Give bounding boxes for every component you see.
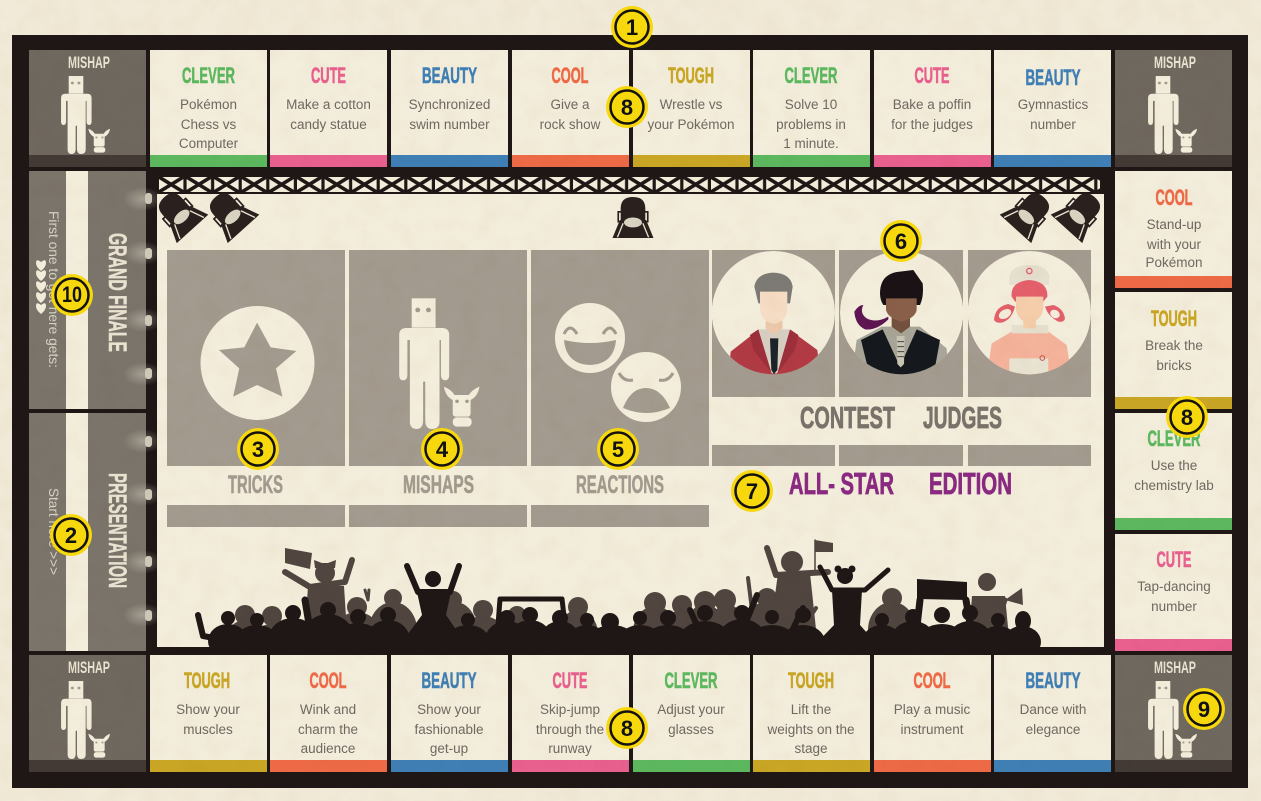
card: cute skip-jump [512, 655, 629, 772]
card: cool music [874, 655, 991, 772]
top row of cards [150, 50, 1111, 167]
badge 8 top [606, 86, 648, 128]
corner: mishap bottom right [1115, 655, 1232, 772]
card: cute skip-jump: runway [548, 741, 592, 756]
presentation lights [123, 429, 163, 627]
icon: happy face [555, 303, 625, 373]
card: clever chess: Pokémon [180, 97, 237, 112]
badge 1: 1 [626, 15, 638, 40]
card: tough wrestle: Wrestle vs [660, 97, 723, 112]
badge 8 top: 8 [621, 95, 633, 120]
grand finale title: GRAND FINALE [103, 233, 131, 352]
badge 4: 4 [436, 437, 449, 462]
card: clever problems: 1 minute. [783, 136, 839, 151]
card: beauty swim: swim number [409, 117, 490, 132]
contest judges label: JUDGES [923, 400, 1002, 435]
card: beauty dance: Dance with [1020, 702, 1086, 717]
card: clever problems: CLEVER [784, 63, 838, 88]
card: tough muscles: Show your [176, 702, 240, 717]
card: beauty swim: Synchronized [409, 97, 490, 112]
card: tough bricks: Break the [1145, 338, 1203, 353]
card: tough muscles: TOUGH [184, 668, 230, 693]
panel: mishaps [349, 250, 527, 527]
badge 10 [51, 274, 93, 316]
panel: reactions [531, 250, 709, 527]
start here text: Start here >>> [46, 488, 62, 575]
badge 9 [1183, 688, 1225, 730]
card: clever chemistry: chemistry lab [1134, 478, 1214, 493]
card: cute tap-dancing [1115, 534, 1232, 651]
card: cute tap-dancing: CUTE [1156, 547, 1192, 572]
card: clever problems: problems in [776, 117, 846, 132]
judge: man in black vest [840, 251, 963, 377]
presentation title: PRESENTATION [103, 473, 131, 588]
stage area [148, 172, 1111, 648]
card: tough weights: Lift the [791, 702, 831, 717]
card: cute tap-dancing: number [1151, 599, 1197, 614]
reactions label: REACTIONS [576, 471, 664, 499]
judge portraits [712, 251, 1091, 377]
contest judges label: CONTEST [800, 400, 895, 435]
card: cool music: Play a music [894, 702, 971, 717]
card: cute skip-jump: through the [536, 722, 604, 737]
badge 1 [611, 6, 653, 48]
lighting truss [157, 172, 1104, 194]
card: clever glasses: Adjust your [657, 702, 725, 717]
card: cool music: COOL [914, 668, 950, 693]
card: cute statue [270, 50, 387, 167]
card: cool music: instrument [900, 722, 964, 737]
card: clever glasses [633, 655, 750, 772]
badge 5: 5 [612, 437, 624, 462]
corner: mishap bottom left: MISHAP [68, 658, 110, 677]
badge 8 right: 8 [1181, 405, 1193, 430]
panel: contest judges [712, 250, 1091, 466]
card: clever chess: Chess vs [181, 117, 237, 132]
card: cute statue: candy statue [290, 117, 367, 132]
card: cool stand-up: COOL [1156, 185, 1192, 210]
crowd silhouette [157, 540, 1104, 662]
badge 5 [597, 428, 639, 470]
corner: mishap top right [1115, 50, 1232, 167]
panel: grand finale [29, 171, 163, 409]
all-star edition heading: EDITION [929, 466, 1012, 501]
card: clever glasses: glasses [668, 722, 714, 737]
bottom row of cards [150, 655, 1111, 772]
card: beauty dance [994, 655, 1111, 772]
card: cute poffin [874, 50, 991, 167]
card: tough bricks: TOUGH [1151, 306, 1197, 331]
card: tough bricks: bricks [1156, 358, 1192, 373]
panel: tricks [167, 250, 345, 527]
card: cool wink: COOL [310, 668, 346, 693]
card: beauty dance: BEAUTY [1026, 668, 1081, 693]
corner: mishap bottom right: MISHAP [1154, 658, 1196, 677]
right column of cards [1115, 171, 1232, 651]
badge 6 [880, 220, 922, 262]
card: cool rock show: rock show [540, 117, 601, 132]
corner: mishap top right: MISHAP [1154, 53, 1196, 72]
card: tough weights: stage [794, 741, 828, 756]
card: cute statue: CUTE [311, 63, 346, 88]
card: tough weights [753, 655, 870, 772]
icon: masked man and pokémon [399, 298, 480, 429]
card: clever chemistry: CLEVER [1148, 426, 1201, 451]
badge 6: 6 [895, 229, 907, 254]
card: clever chess: Computer [179, 136, 239, 151]
grand finale rule: First one to get here gets: [46, 211, 62, 368]
corner: mishap top left [29, 50, 146, 167]
card: cool stand-up [1115, 171, 1232, 288]
card: beauty fashion [391, 655, 508, 772]
card: tough wrestle: TOUGH [668, 63, 714, 88]
card: tough wrestle: your Pokémon [647, 117, 735, 132]
stage spotlights [148, 183, 1111, 243]
card: beauty fashion: fashionable [414, 722, 484, 737]
panel: presentation [29, 413, 163, 651]
card: clever chemistry: Use the [1151, 458, 1197, 473]
card: cool rock show: COOL [552, 63, 588, 88]
badge 7 [731, 470, 773, 512]
corner: mishap bottom left [29, 655, 146, 772]
mishaps label: MISHAPS [403, 471, 474, 499]
badge 2: 2 [65, 523, 77, 548]
tricks label: TRICKS [228, 471, 283, 499]
card: clever glasses: CLEVER [664, 668, 718, 693]
judge: nurse [968, 251, 1091, 377]
card: cute poffin: CUTE [914, 63, 950, 88]
card: cool wink: Wink and [300, 702, 356, 717]
card: cool wink: charm the [298, 722, 358, 737]
badge 3 [237, 428, 279, 470]
card: cool wink [270, 655, 387, 772]
card: beauty fashion: BEAUTY [422, 668, 477, 693]
badge 9: 9 [1198, 697, 1210, 722]
corner: mishap top left: MISHAP [68, 53, 110, 72]
badge 3: 3 [252, 437, 264, 462]
card: cool wink: audience [301, 741, 355, 756]
card: cute statue: Make a cotton [286, 97, 371, 112]
icon: star in circle [200, 306, 314, 420]
front crowd [157, 566, 1104, 662]
card: beauty dance: elegance [1026, 722, 1080, 737]
card: cool stand-up: with your [1146, 237, 1202, 252]
card: clever chess [150, 50, 267, 167]
icon: sad face [611, 352, 681, 422]
card: clever chemistry [1115, 413, 1232, 530]
badge 8 bottom [606, 707, 648, 749]
card: tough muscles: muscles [183, 722, 233, 737]
card: cool rock show [512, 50, 629, 167]
badge 7: 7 [746, 479, 758, 504]
grand finale lights [123, 187, 163, 386]
card: clever problems: Solve 10 [785, 97, 837, 112]
judge: man in red suit [712, 251, 835, 377]
card: cute poffin: for the judges [891, 117, 973, 132]
card: beauty fashion: Show your [417, 702, 481, 717]
card: beauty gymnastics: Gymnastics [1018, 97, 1089, 112]
card: cute poffin: Bake a poffin [893, 97, 971, 112]
card: cool rock show: Give a [550, 97, 590, 112]
card: beauty gymnastics: BEAUTY [1026, 65, 1081, 90]
badge 4 [421, 428, 463, 470]
card: tough weights: TOUGH [788, 668, 834, 693]
card: beauty swim: BEAUTY [422, 63, 477, 88]
card: cute tap-dancing: Tap-dancing [1137, 579, 1211, 594]
badge 2 [50, 514, 92, 556]
card: cool stand-up: Stand-up [1147, 217, 1201, 232]
all-star edition heading: ALL- STAR [789, 466, 894, 501]
card: tough muscles [150, 655, 267, 772]
card: beauty fashion: get-up [430, 741, 468, 756]
card: tough wrestle [633, 50, 750, 167]
badge 10: 10 [62, 282, 82, 307]
badge 8 right [1166, 396, 1208, 438]
card: beauty swim [391, 50, 508, 167]
card: tough weights: weights on the [766, 722, 855, 737]
card: clever chess: CLEVER [182, 63, 235, 88]
card: cute skip-jump: Skip-jump [540, 702, 600, 717]
card: clever problems [753, 50, 870, 167]
card: tough bricks [1115, 292, 1232, 409]
badge 8 bottom: 8 [621, 716, 633, 741]
rear crowd [227, 540, 1023, 660]
card: beauty gymnastics [994, 50, 1111, 167]
card: cute skip-jump: CUTE [552, 668, 588, 693]
card: beauty gymnastics: number [1030, 117, 1076, 132]
card: cool stand-up: Pokémon [1145, 255, 1203, 270]
icon: hearts [36, 260, 46, 314]
